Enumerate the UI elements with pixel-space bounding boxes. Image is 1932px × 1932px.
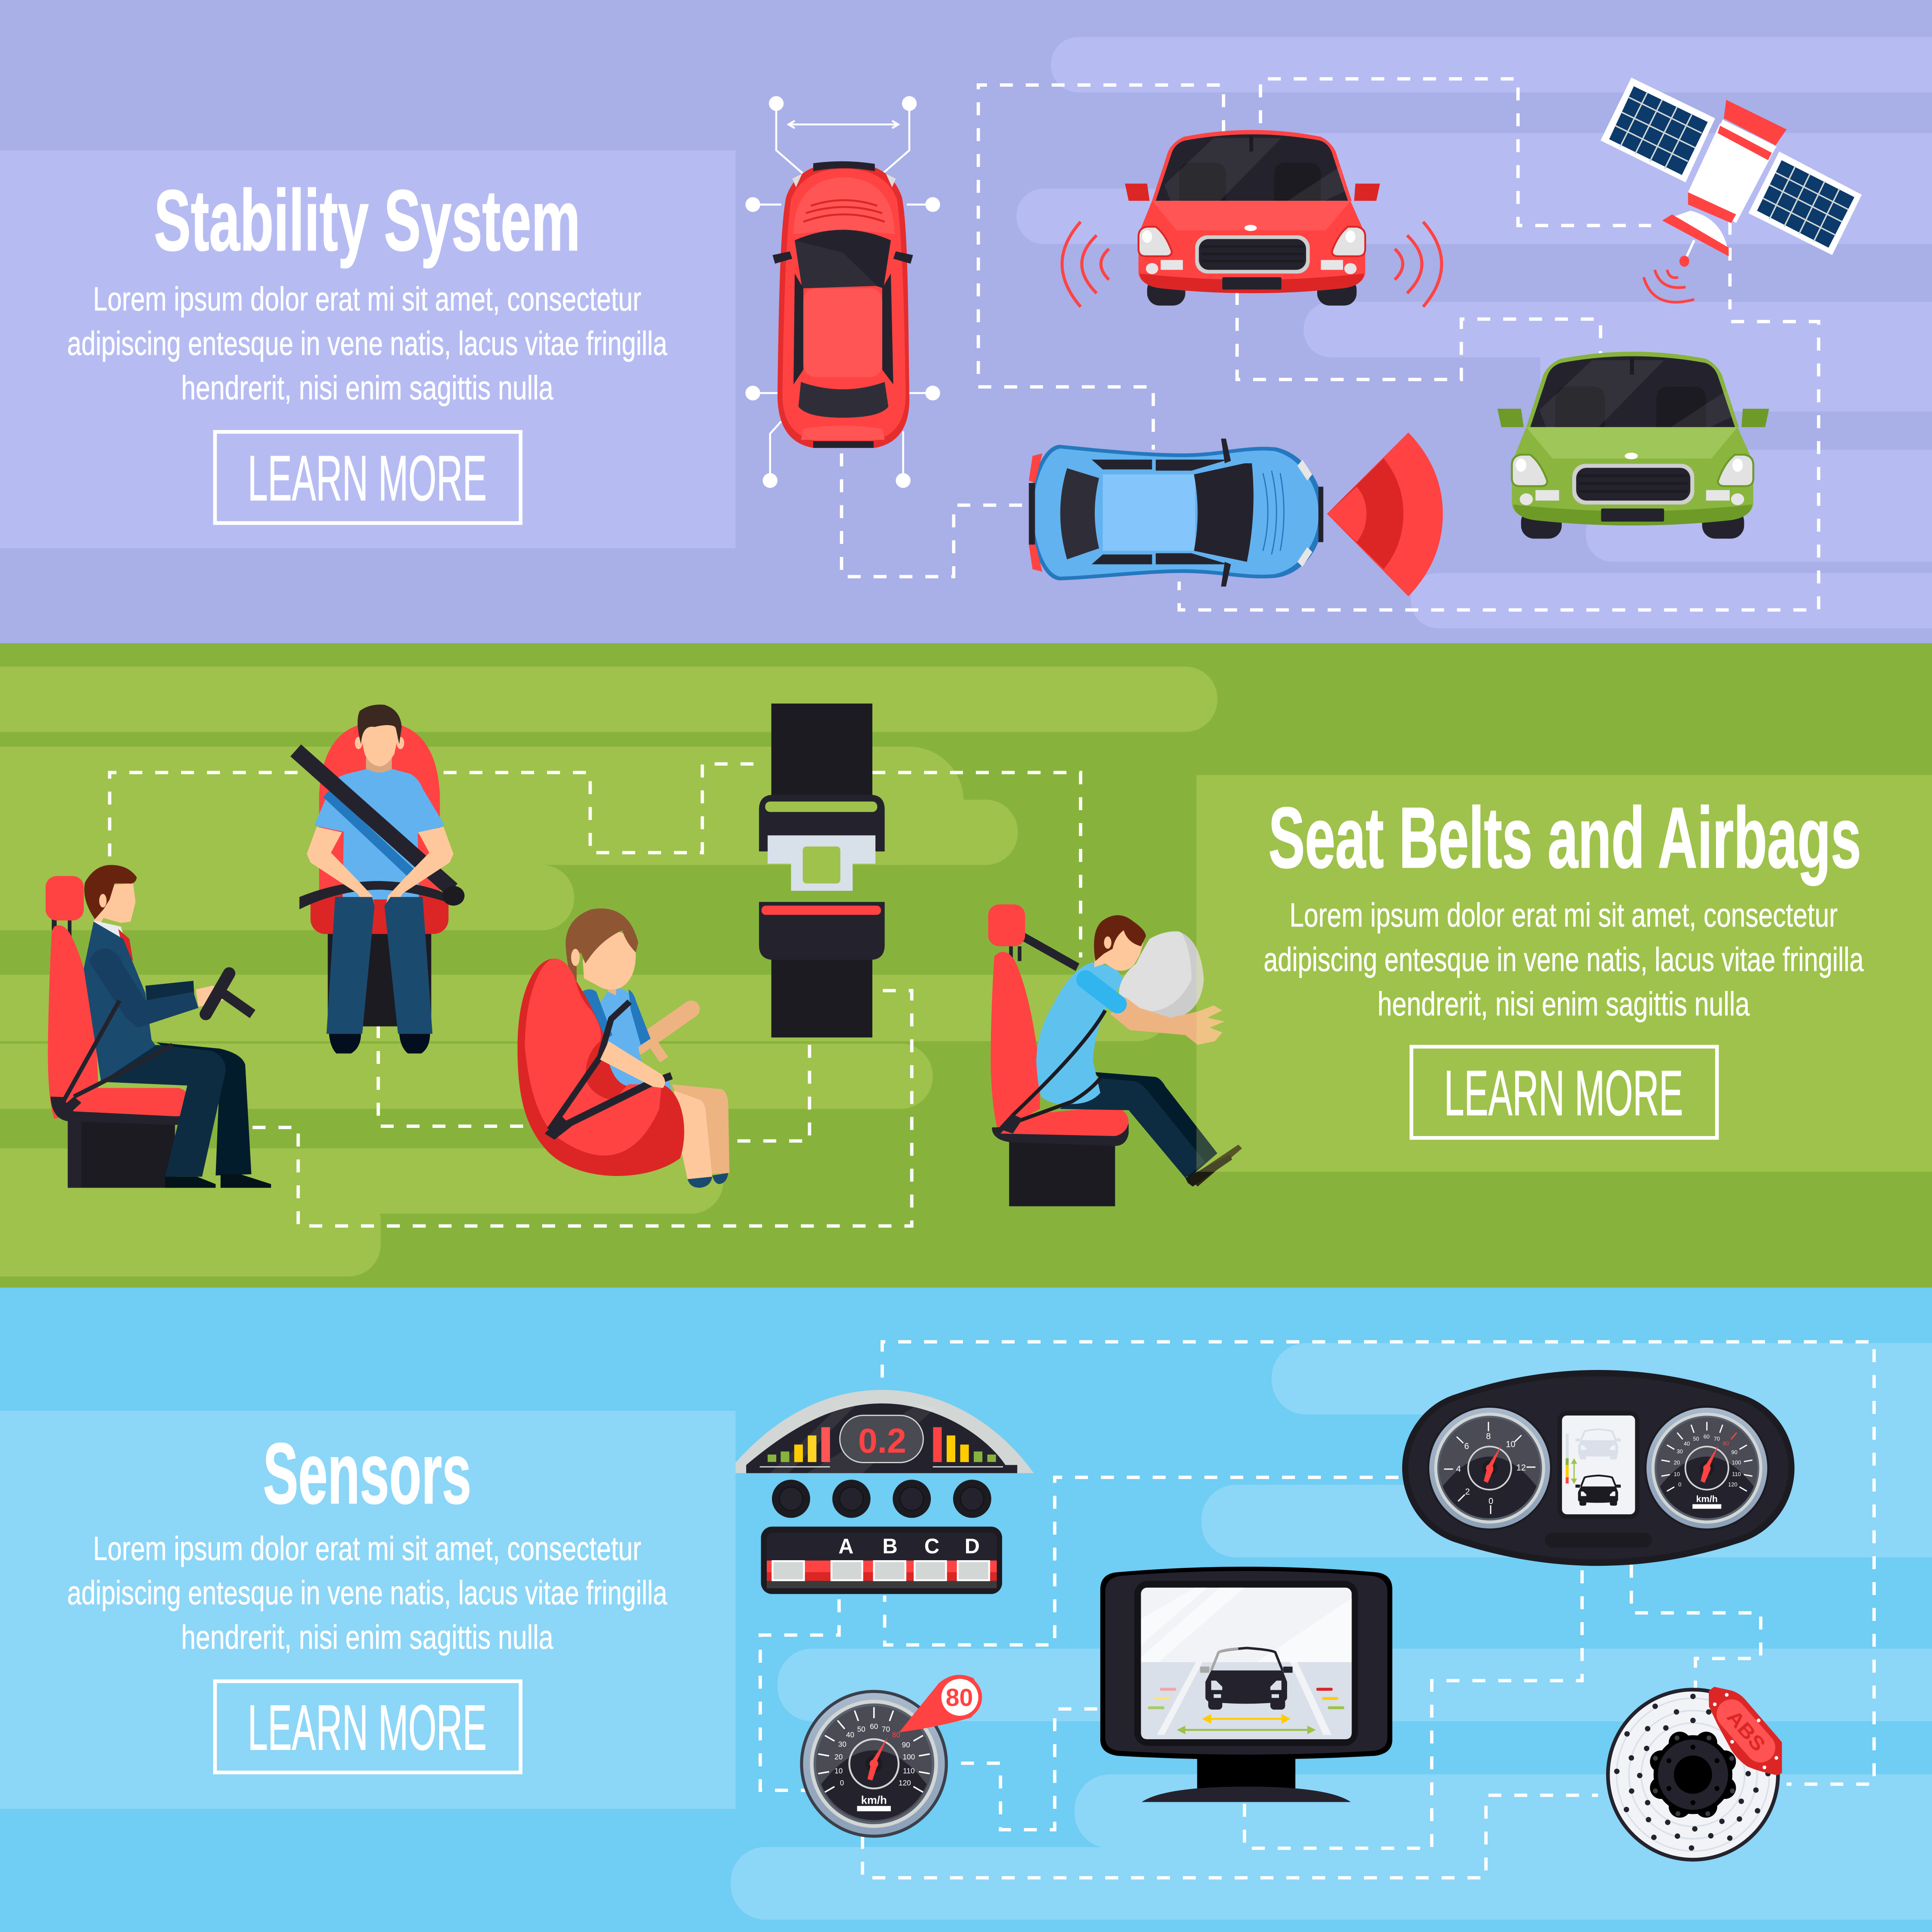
illustration: speedometer with speed callout: 0 bbox=[840, 1778, 844, 1787]
body text: hendrerit, nisi enim sagittis nulla bbox=[1378, 986, 1750, 1023]
left gauge: 4 bbox=[1456, 1464, 1461, 1474]
illustration: speedometer with speed callout: 100 bbox=[902, 1753, 915, 1761]
illustration: child in booster seat bbox=[517, 908, 729, 1188]
right gauge: 50 bbox=[1693, 1435, 1699, 1442]
center car distance screen bbox=[1558, 1411, 1640, 1519]
background: sensors band bbox=[0, 1288, 1932, 1932]
background: safety band bbox=[0, 643, 1932, 1289]
right gauge: 80 bbox=[1723, 1440, 1729, 1446]
body text: Lorem ipsum dolor erat mi sit amet, consectetur bbox=[93, 281, 641, 318]
illustration: speedometer with speed callout: 10 bbox=[835, 1767, 843, 1775]
illustration: parking sensor display: A bbox=[838, 1535, 854, 1558]
body text: hendrerit, nisi enim sagittis nulla bbox=[181, 370, 553, 407]
brake hub bbox=[1650, 1732, 1736, 1818]
illustration: speedometer with speed callout: 60 bbox=[870, 1722, 878, 1731]
body text bbox=[67, 1530, 668, 1656]
driver jacket bbox=[84, 922, 166, 1082]
button: learn more: LEARN MORE bbox=[248, 1692, 487, 1763]
left gauge: 12 bbox=[1516, 1463, 1526, 1473]
lower car bbox=[1576, 1476, 1621, 1506]
right gauge: 60 bbox=[1704, 1433, 1710, 1440]
button: learn more: LEARN MORE bbox=[248, 442, 487, 514]
heading: stability system: Stability System bbox=[154, 172, 580, 269]
panel: seat belts and airbags text bbox=[1197, 775, 1932, 1172]
button: learn more bbox=[1411, 1047, 1717, 1138]
illustration: speedometer with speed callout: 110 bbox=[903, 1767, 915, 1775]
upper car bbox=[1576, 1429, 1621, 1459]
illustration: speedometer with speed callout: 70 bbox=[882, 1725, 890, 1734]
dashed connectors: sensors bbox=[760, 1342, 1874, 1878]
monitor: car silhouette bbox=[1200, 1648, 1293, 1710]
airbag bbox=[1119, 931, 1204, 1019]
right gauge: 120 bbox=[1728, 1481, 1738, 1488]
right gauge: 40 bbox=[1684, 1440, 1690, 1447]
body text: Lorem ipsum dolor erat mi sit amet, consectetur bbox=[93, 1530, 641, 1567]
body text: hendrerit, nisi enim sagittis nulla bbox=[181, 1619, 553, 1656]
button: learn more: LEARN MORE bbox=[1444, 1057, 1683, 1129]
body text bbox=[1264, 897, 1864, 1023]
right gauge: 20 bbox=[1674, 1459, 1680, 1466]
illustration: rear view monitor bbox=[1100, 1567, 1392, 1802]
dashed connectors: stability bbox=[841, 79, 1819, 610]
illustration: blue car top view with radar cone bbox=[1029, 432, 1443, 596]
illustration: green car front view bbox=[1498, 352, 1769, 539]
illustration: front-facing man in seat belt bbox=[296, 705, 465, 1054]
right gauge: 10 bbox=[1674, 1471, 1680, 1477]
right gauge: 90 bbox=[1731, 1449, 1738, 1455]
ABS caliper bbox=[1709, 1687, 1782, 1775]
illustration: speedometer with speed callout: 30 bbox=[838, 1740, 846, 1749]
illustration: red car top view with sensors bbox=[745, 96, 940, 488]
ABS caliper: ABS bbox=[1722, 1706, 1770, 1756]
body text: adipiscing entesque in vene natis, lacus vitae fringilla bbox=[67, 1575, 668, 1612]
illustration: driver with steering wheel and seat belt bbox=[46, 865, 271, 1188]
right gauge: 100 bbox=[1732, 1459, 1741, 1466]
right gauge bbox=[1644, 1406, 1769, 1531]
button: learn more bbox=[215, 432, 521, 523]
left gauge: 8 bbox=[1486, 1432, 1491, 1441]
panel: sensors text bbox=[0, 1411, 735, 1809]
dashed connectors: safety bbox=[109, 764, 1081, 1226]
illustration: speedometer with speed callout: 40 bbox=[846, 1730, 854, 1739]
illustration: parking sensor display: 0.2 bbox=[858, 1422, 906, 1461]
body text bbox=[67, 281, 668, 407]
illustration: speedometer with speed callout bbox=[800, 1675, 982, 1838]
illustration: instrument cluster bbox=[1402, 1370, 1795, 1566]
right gauge: 110 bbox=[1732, 1471, 1741, 1477]
illustration: parking sensor display bbox=[735, 1390, 1034, 1594]
background: stability band bbox=[0, 0, 1932, 644]
callout: speed limit 80 bbox=[899, 1675, 982, 1732]
right gauge: 0 bbox=[1678, 1481, 1681, 1488]
illustration: speedometer with speed callout: 20 bbox=[835, 1753, 843, 1761]
button: learn more bbox=[215, 1681, 521, 1772]
illustration: parking sensor display: C bbox=[924, 1535, 939, 1558]
left gauge bbox=[1427, 1406, 1552, 1531]
left gauge: 10 bbox=[1506, 1440, 1516, 1449]
illustration: speedometer with speed callout: 50 bbox=[857, 1725, 866, 1734]
illustration: speedometer with speed callout: km/h bbox=[861, 1795, 887, 1807]
illustration: red car front view with wave signals bbox=[1062, 130, 1442, 307]
left gauge: 6 bbox=[1464, 1442, 1469, 1451]
left gauge: 2 bbox=[1465, 1487, 1470, 1497]
left gauge: 0 bbox=[1488, 1497, 1493, 1506]
illustration: speedometer with speed callout: 120 bbox=[899, 1778, 911, 1787]
right gauge: 70 bbox=[1714, 1435, 1720, 1442]
illustration: seat belt buckle bbox=[759, 704, 885, 1037]
illustration: ABS brake disc bbox=[1608, 1687, 1782, 1860]
heading: sensors: Sensors bbox=[263, 1425, 471, 1522]
illustration: satellite bbox=[1601, 78, 1862, 302]
right gauge: km/h bbox=[1696, 1494, 1718, 1504]
illustration: man with deployed airbag bbox=[988, 905, 1242, 1206]
panel: stability system text bbox=[0, 150, 735, 548]
illustration: parking sensor display: B bbox=[882, 1535, 898, 1558]
callout: speed limit 80: 80 bbox=[946, 1684, 973, 1711]
body text: adipiscing entesque in vene natis, lacus vitae fringilla bbox=[67, 325, 668, 362]
illustration: speedometer with speed callout: 80 bbox=[892, 1730, 900, 1739]
illustration: speedometer with speed callout: 90 bbox=[902, 1741, 910, 1749]
right gauge: 30 bbox=[1677, 1448, 1683, 1455]
booster seat shell bbox=[517, 959, 684, 1176]
illustration: parking sensor display: D bbox=[965, 1535, 980, 1558]
